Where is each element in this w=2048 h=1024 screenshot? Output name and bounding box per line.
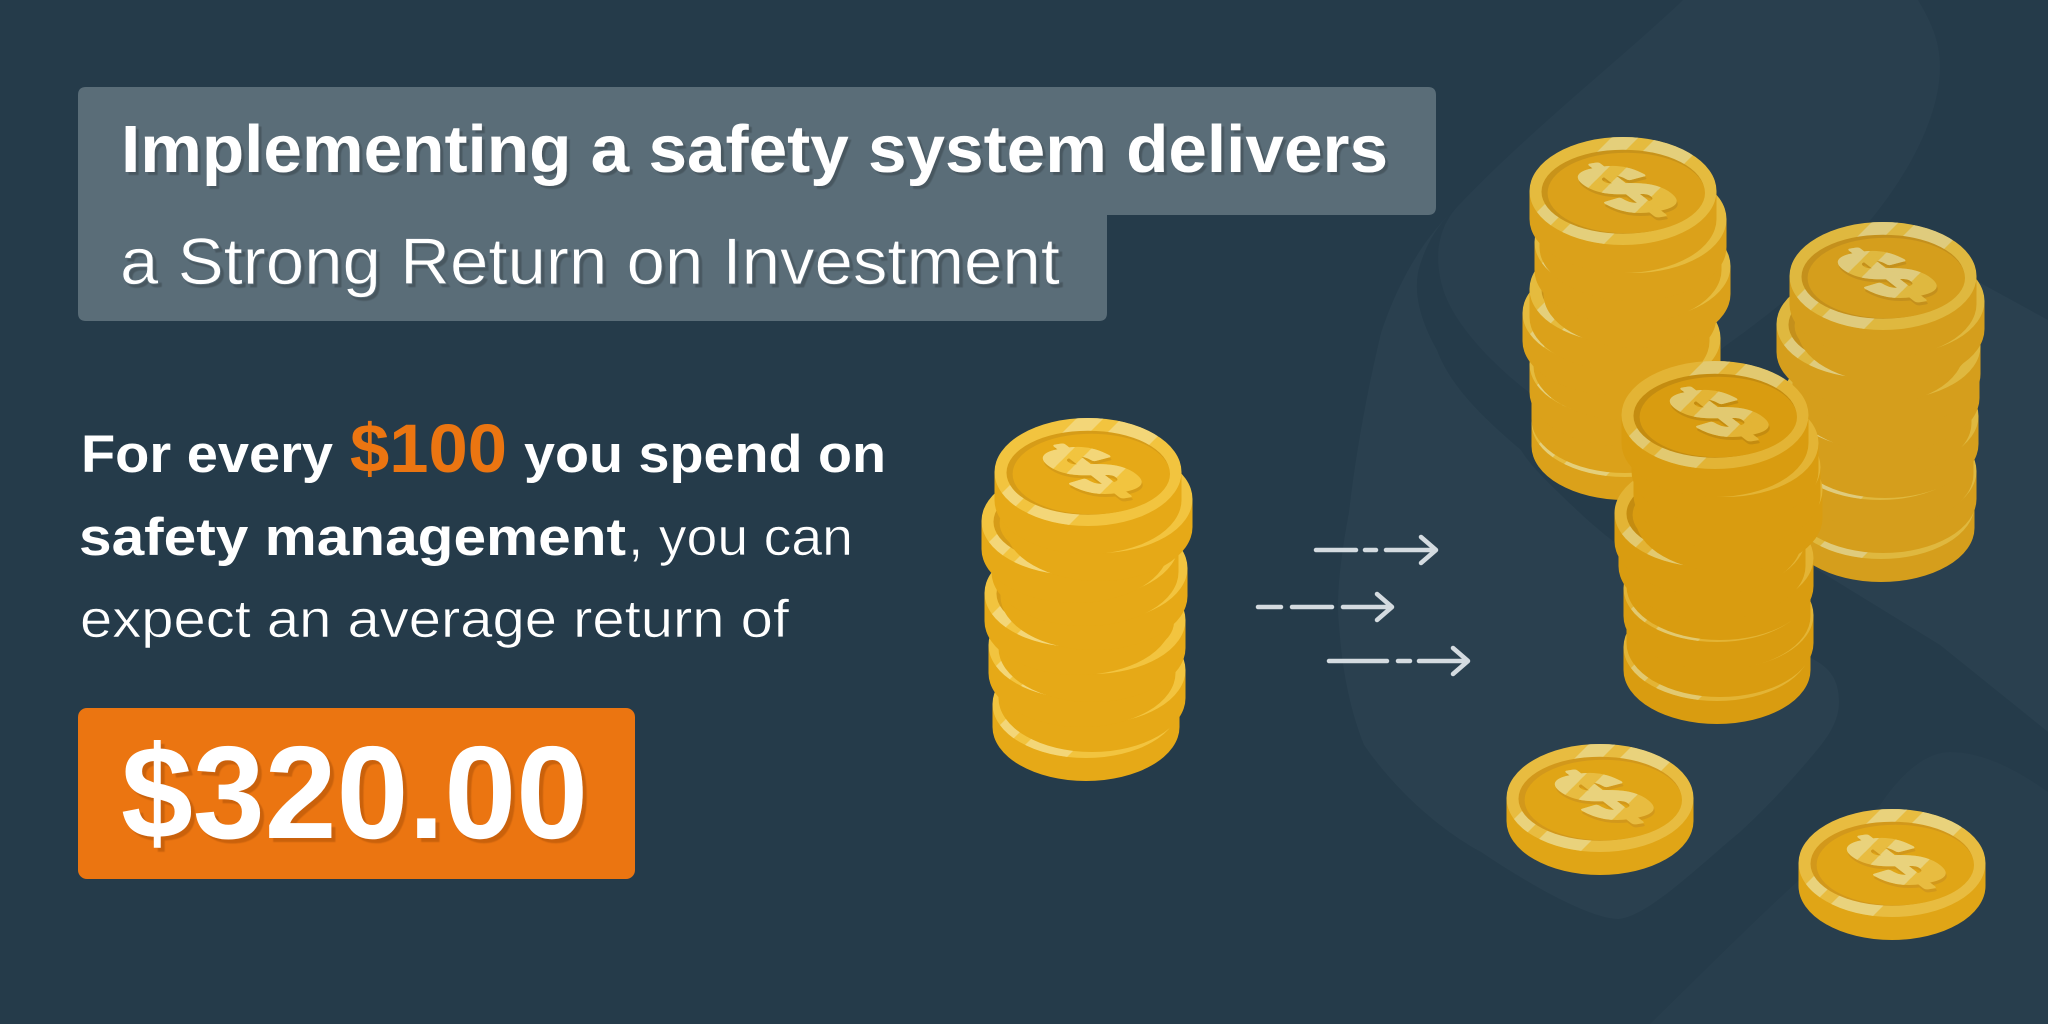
- return value callout: [78, 708, 635, 879]
- single coin: right: $: [1820, 825, 1974, 904]
- coin stack: back right: [1776, 222, 1984, 582]
- callout amount: $320.00: [121, 719, 588, 866]
- text: you spend on: you spend on: [524, 425, 886, 484]
- coin stack: front: [1614, 361, 1822, 724]
- arrow 2: [1258, 594, 1392, 620]
- arrow 1: [1316, 537, 1436, 563]
- title line 2: a Strong Return on Investment: [120, 224, 1060, 298]
- text: highlighted $100: $100: [350, 410, 507, 487]
- single coin: centre: [1506, 744, 1694, 875]
- arrows: [1258, 537, 1468, 674]
- top coin with dollar sign: $: [1642, 374, 1796, 453]
- arrow 3: [1329, 648, 1468, 674]
- top coin with dollar sign: $: [1550, 150, 1704, 229]
- title banner: [78, 87, 1436, 321]
- title background panel: [78, 87, 1436, 321]
- top coin with dollar sign: [1790, 222, 1976, 355]
- top coin with dollar sign: $: [1015, 431, 1169, 510]
- top coin with dollar sign: $: [1551, 153, 1705, 232]
- top coin with dollar sign: $: [1811, 238, 1965, 317]
- top coin with dollar sign: [1622, 361, 1808, 497]
- text: for every: For every: [81, 425, 334, 484]
- top coin with dollar sign: [1530, 137, 1716, 273]
- single coin: centre: $: [1528, 760, 1682, 839]
- callout panel: [78, 708, 635, 879]
- body statement: [79, 410, 886, 649]
- text: expect an average return of: expect an average return of: [80, 590, 789, 649]
- top coin with dollar sign: $: [1643, 377, 1797, 456]
- top coin with dollar sign: $: [1642, 374, 1796, 453]
- single coin: centre: $: [1527, 757, 1681, 836]
- coin stack: back left: [1522, 137, 1730, 500]
- top coin with dollar sign: $: [1810, 235, 1964, 314]
- single coin: right: $: [1819, 822, 1973, 901]
- single coin: right: [1798, 809, 1986, 940]
- text: you can: , you can: [628, 508, 853, 567]
- text: safety management: safety management: [79, 508, 626, 567]
- top coin with dollar sign: [994, 418, 1182, 553]
- coin stack: small investment: [982, 418, 1192, 781]
- title line 1: Implementing a safety system delivers: [121, 112, 1388, 187]
- single coin: centre: $: [1527, 757, 1681, 836]
- background watermark shapes: [1338, 0, 2048, 1024]
- single coin: right: $: [1819, 822, 1973, 901]
- top coin with dollar sign: $: [1810, 235, 1964, 314]
- top coin with dollar sign: $: [1016, 434, 1170, 513]
- top coin with dollar sign: $: [1550, 150, 1704, 229]
- top coin with dollar sign: $: [1015, 431, 1169, 510]
